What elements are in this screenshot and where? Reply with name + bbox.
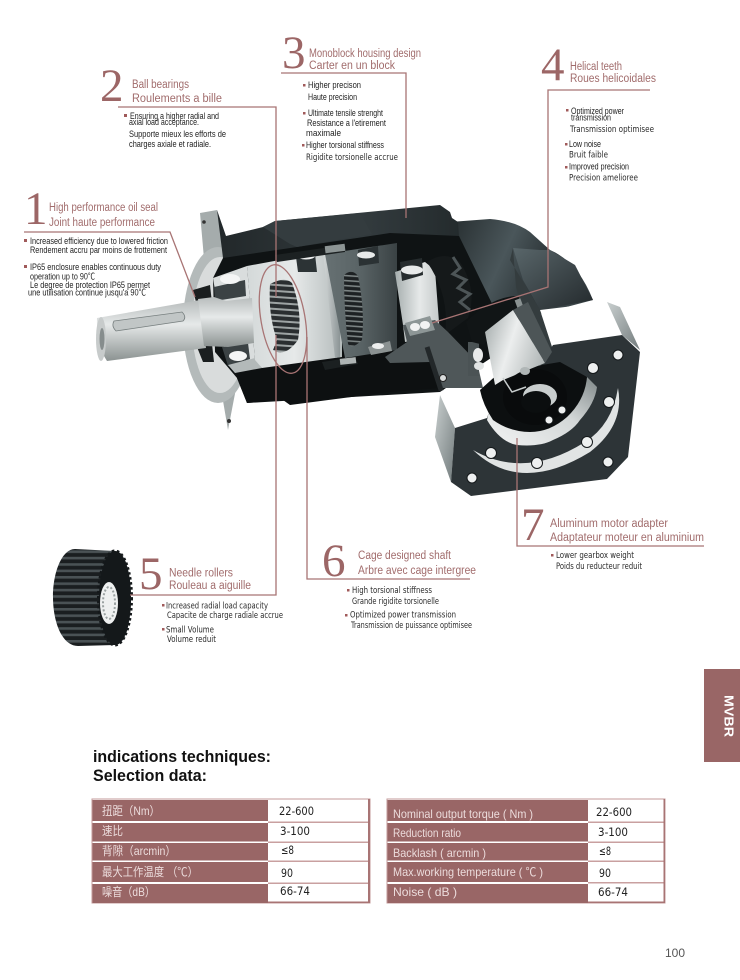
callout 4: helical teeth: Improved precision	[569, 162, 629, 172]
table: English specifications: 22-600	[596, 805, 632, 819]
callout 7: aluminum motor adapter: 7	[521, 499, 544, 551]
icon: needle roller gear	[53, 549, 132, 646]
callout 5: needle rollers: 5	[139, 548, 162, 600]
callout 1: oil seal: High performance oil seal	[49, 202, 158, 214]
callout 6: cage designed shaft: Transmission de puissance optimisee	[350, 621, 472, 631]
callout 2: ball bearings: axial load acceptance.	[129, 117, 199, 127]
callout 4: helical teeth: Precision amelioree	[569, 174, 638, 184]
callout 3: monoblock housing: Higher torsional stiffness	[306, 140, 384, 150]
callout 5: needle rollers	[53, 335, 283, 646]
callout 1: oil seal: 1	[24, 183, 48, 235]
table: Chinese specifications: 最大工作温度 （℃）	[102, 864, 198, 879]
callout 3: monoblock housing: 3	[282, 27, 306, 79]
table: Chinese specifications: ≤8	[281, 843, 294, 857]
callout 7: aluminum motor adapter: Adaptateur moteur en aluminium	[550, 532, 704, 544]
callout 6: cage designed shaft: Arbre avec cage intergree	[358, 565, 476, 577]
table: English specifications: Backlash ( arcmin )	[393, 846, 486, 860]
table: Chinese specifications: 22-600	[279, 804, 314, 818]
section tab: MVBR	[704, 669, 740, 762]
callout 2: ball bearings: Supporte mieux les efforts de	[129, 129, 226, 139]
table: Chinese specifications: 速比	[102, 824, 123, 838]
callout 3: monoblock housing: Monoblock housing design	[309, 48, 421, 60]
callout 1: oil seal: operation up to 90℃	[30, 272, 95, 282]
callout 3: monoblock housing: Rigidite torsionelle accrue	[306, 153, 398, 163]
callout 3: monoblock housing: Carter en un block	[309, 60, 395, 72]
callout 7: aluminum motor adapter: Lower gearbox weight	[556, 551, 634, 561]
callout 4: helical teeth: Roues helicoidales	[570, 73, 656, 85]
large bore crescent	[487, 365, 597, 445]
callout 6: cage designed shaft	[307, 337, 476, 631]
table: English specifications: Noise ( dB )	[393, 885, 457, 899]
callout 2: ball bearings: Roulements a bille	[132, 93, 222, 105]
table: Chinese specifications: 扭距（Nm）	[102, 804, 160, 818]
callout 6: cage designed shaft: High torsional stiffness	[352, 586, 432, 596]
table: Chinese specifications: 背隙（arcmin）	[102, 844, 176, 858]
callout 2: ball bearings: charges axiale et radiale.	[129, 139, 211, 149]
page number: 100	[665, 948, 685, 960]
callout 5: needle rollers: Capacite de charge radiale accrue	[167, 611, 283, 621]
callout 5: needle rollers: Increased radial load capacity	[166, 602, 269, 612]
heading: selection data	[93, 748, 271, 785]
table: Chinese specifications	[92, 799, 370, 903]
heading: selection data: Selection data:	[93, 767, 207, 785]
callout 4: helical teeth: Transmission optimisee	[569, 125, 654, 135]
callout 6: cage designed shaft: Cage designed shaft	[358, 550, 452, 562]
callout 5: needle rollers: Needle rollers	[169, 568, 233, 580]
callout 3: monoblock housing: Higher precison	[308, 80, 361, 90]
callout 5: needle rollers: Volume reduit	[167, 635, 216, 645]
callout 1: oil seal	[24, 183, 195, 298]
callout 4: helical teeth: Low noise	[569, 139, 601, 149]
callout 7: aluminum motor adapter: Aluminum motor adapter	[550, 518, 668, 530]
illustration: cutaway right-angle gearbox	[96, 205, 640, 496]
callout 1: oil seal: Rendement accru par moins de frottement	[30, 245, 167, 255]
table: English specifications	[387, 799, 665, 903]
callout 1: oil seal: IP65 enclosure enables continuous duty	[30, 262, 161, 272]
table: English specifications: Reduction ratio	[393, 826, 461, 840]
callout 3: monoblock housing: maximale	[306, 128, 341, 138]
callout 2: ball bearings: 2	[100, 60, 124, 112]
callout 4: helical teeth: Bruit faible	[569, 150, 608, 160]
callout 2: ball bearings: Ball bearings	[132, 79, 189, 91]
heading: selection data: indications techniques:	[93, 748, 271, 766]
callout 4: helical teeth: Optimized power	[571, 106, 624, 116]
table: Chinese specifications: 90	[281, 866, 293, 880]
callout 7: aluminum motor adapter: Poids du reducteur reduit	[556, 562, 642, 572]
callout 2: ball bearings	[100, 60, 276, 297]
table: English specifications: Nominal output torque ( Nm )	[393, 807, 533, 821]
table: English specifications: Max.working temperature ( ℃ )	[393, 865, 543, 879]
callout 3: monoblock housing	[281, 27, 421, 218]
table: English specifications: 90	[599, 866, 611, 880]
callout 2: ball bearings: Ensuring a higher radial and	[130, 111, 219, 121]
callout 7: aluminum motor adapter	[517, 438, 704, 572]
callout 3: monoblock housing: Haute precision	[308, 92, 357, 102]
callout 5: needle rollers: Small Volume	[166, 626, 214, 636]
callout 4: helical teeth	[432, 39, 656, 323]
callout 4: helical teeth: Helical teeth	[570, 61, 622, 73]
callout 4: helical teeth: transmission	[571, 112, 611, 122]
callout 5: needle rollers: Rouleau a aiguille	[169, 580, 251, 592]
callout 6: cage designed shaft: 6	[322, 535, 346, 587]
table: Chinese specifications: 噪音（dB）	[102, 884, 155, 899]
table: English specifications: 3-100	[598, 825, 628, 839]
callout 1: oil seal: Increased efficiency due to lowered friction	[30, 236, 168, 246]
callout 3: monoblock housing: Ultimate tensile strenght	[308, 108, 383, 118]
callout 3: monoblock housing: Resistance a l'etirement	[307, 118, 386, 128]
callout 4: helical teeth: 4	[541, 39, 564, 91]
table: English specifications: ≤8	[599, 844, 611, 858]
table: English specifications: 66-74	[598, 885, 628, 899]
table: Chinese specifications: 66-74	[280, 884, 310, 898]
callout 1: oil seal: une utilisation continue jusqu'a 90℃	[28, 288, 146, 298]
callout 1: oil seal: Joint haute performance	[49, 217, 155, 229]
callout 1: oil seal: Le degree de protection IP65 permet	[30, 280, 150, 290]
section tab: MVBR: MVBR	[722, 695, 737, 738]
callout 6: cage designed shaft: Grande rigidite torsionelle	[352, 597, 439, 607]
highlight ellipse on cage shaft	[252, 261, 314, 377]
callout 6: cage designed shaft: Optimized power transmission	[350, 610, 456, 620]
table: Chinese specifications: 3-100	[280, 824, 310, 838]
